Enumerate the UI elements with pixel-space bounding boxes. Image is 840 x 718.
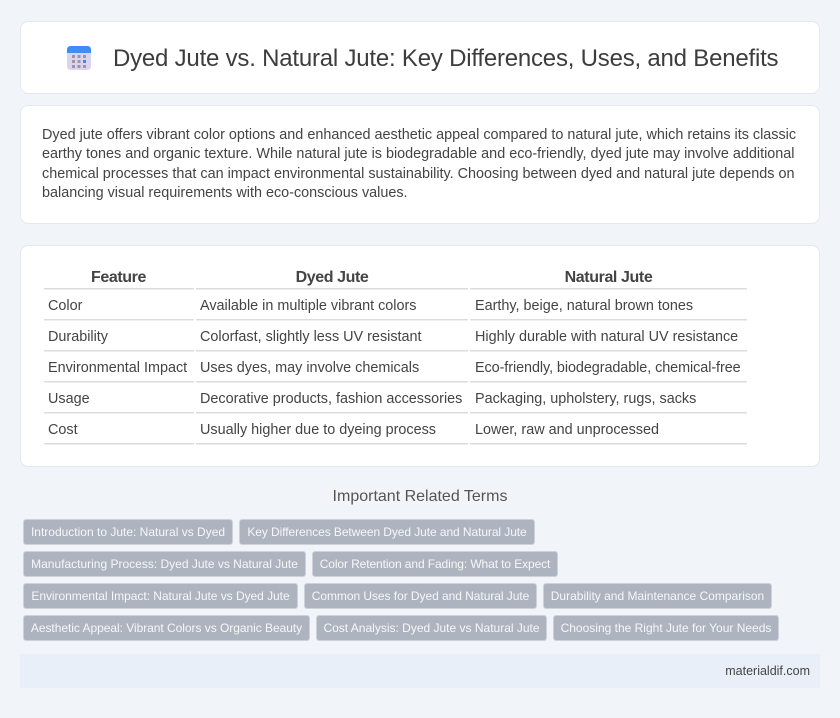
chip: [304, 583, 537, 609]
row: usage: Usage: [48, 391, 90, 407]
chip: Manufacturing Process: Dyed Jute vs Natural Jute: [31, 557, 298, 571]
intro text: Dyed jute offers vibrant color options and enhanced aesthetic appeal compared to natural jute, which retains its classic: [42, 127, 796, 143]
row: cost: Cost: [48, 422, 78, 438]
row: color: [48, 298, 693, 314]
table header: [91, 269, 652, 286]
related terms chips: [23, 519, 779, 641]
row: environmental impact: Eco-friendly, biodegradable, chemical-free: [475, 360, 741, 376]
header panel: [20, 21, 820, 94]
row: cost: Lower, raw and unprocessed: [475, 422, 659, 438]
table header: Feature: [91, 269, 146, 286]
row: color: Available in multiple vibrant colors: [200, 298, 416, 314]
chip: [23, 519, 233, 545]
row: environmental impact: Environmental Impact: [48, 360, 187, 376]
chip: Durability and Maintenance Comparison: [551, 589, 764, 603]
title: Dyed Jute vs. Natural Jute: Key Differences, Uses, and Benefits: [113, 45, 778, 72]
row: usage: Decorative products, fashion accessories: [200, 391, 462, 407]
row: cost: [48, 422, 659, 438]
intro text: [42, 127, 796, 201]
chip: [23, 583, 298, 609]
row: usage: [48, 391, 696, 407]
chip: Common Uses for Dyed and Natural Jute: [312, 589, 529, 603]
row: environmental impact: [48, 360, 741, 376]
chip: [239, 519, 535, 545]
icon: calendar grid: [67, 46, 91, 70]
chip: [316, 615, 547, 641]
chip: [23, 615, 310, 641]
chip: Cost Analysis: Dyed Jute vs Natural Jute: [323, 621, 540, 635]
table header: Natural Jute: [565, 269, 652, 286]
chip: Choosing the Right Jute for Your Needs: [561, 621, 771, 635]
table header: Dyed Jute: [296, 269, 368, 286]
row: durability: Durability: [48, 329, 108, 345]
intro text: chemical processes that can impact environmental sustainability. Choosing between dyed and natural jute depends on: [42, 166, 794, 182]
row: durability: Highly durable with natural UV resistance: [475, 329, 738, 345]
chip: Key Differences Between Dyed Jute and Natural Jute: [247, 525, 527, 539]
chip: [543, 583, 772, 609]
row: cost: Usually higher due to dyeing process: [200, 422, 436, 438]
row: durability: [48, 329, 738, 345]
chip: Color Retention and Fading: What to Expect: [320, 557, 550, 571]
row: durability: Colorfast, slightly less UV resistant: [200, 329, 422, 345]
chip: [553, 615, 779, 641]
intro text: earthy tones and organic texture. While natural jute is biodegradable and eco-friendly, dyed jute may involve additional: [42, 146, 794, 162]
intro panel: [20, 105, 820, 224]
row: color: Earthy, beige, natural brown tones: [475, 298, 693, 314]
chip: [312, 551, 558, 577]
intro text: balancing visual requirements with eco-conscious values.: [42, 185, 408, 201]
chip: Aesthetic Appeal: Vibrant Colors vs Organic Beauty: [31, 621, 302, 635]
row: color: Color: [48, 298, 82, 314]
row: environmental impact: Uses dyes, may involve chemicals: [200, 360, 419, 376]
chip: Environmental Impact: Natural Jute vs Dyed Jute: [31, 589, 290, 603]
related terms heading: Important Related Terms: [333, 488, 507, 505]
chip: Introduction to Jute: Natural vs Dyed: [31, 525, 225, 539]
comparison table panel: [20, 245, 820, 467]
footer site name: materialdif.com: [725, 664, 810, 678]
footer bar: [20, 654, 820, 688]
chip: [23, 551, 306, 577]
row: usage: Packaging, upholstery, rugs, sacks: [475, 391, 696, 407]
